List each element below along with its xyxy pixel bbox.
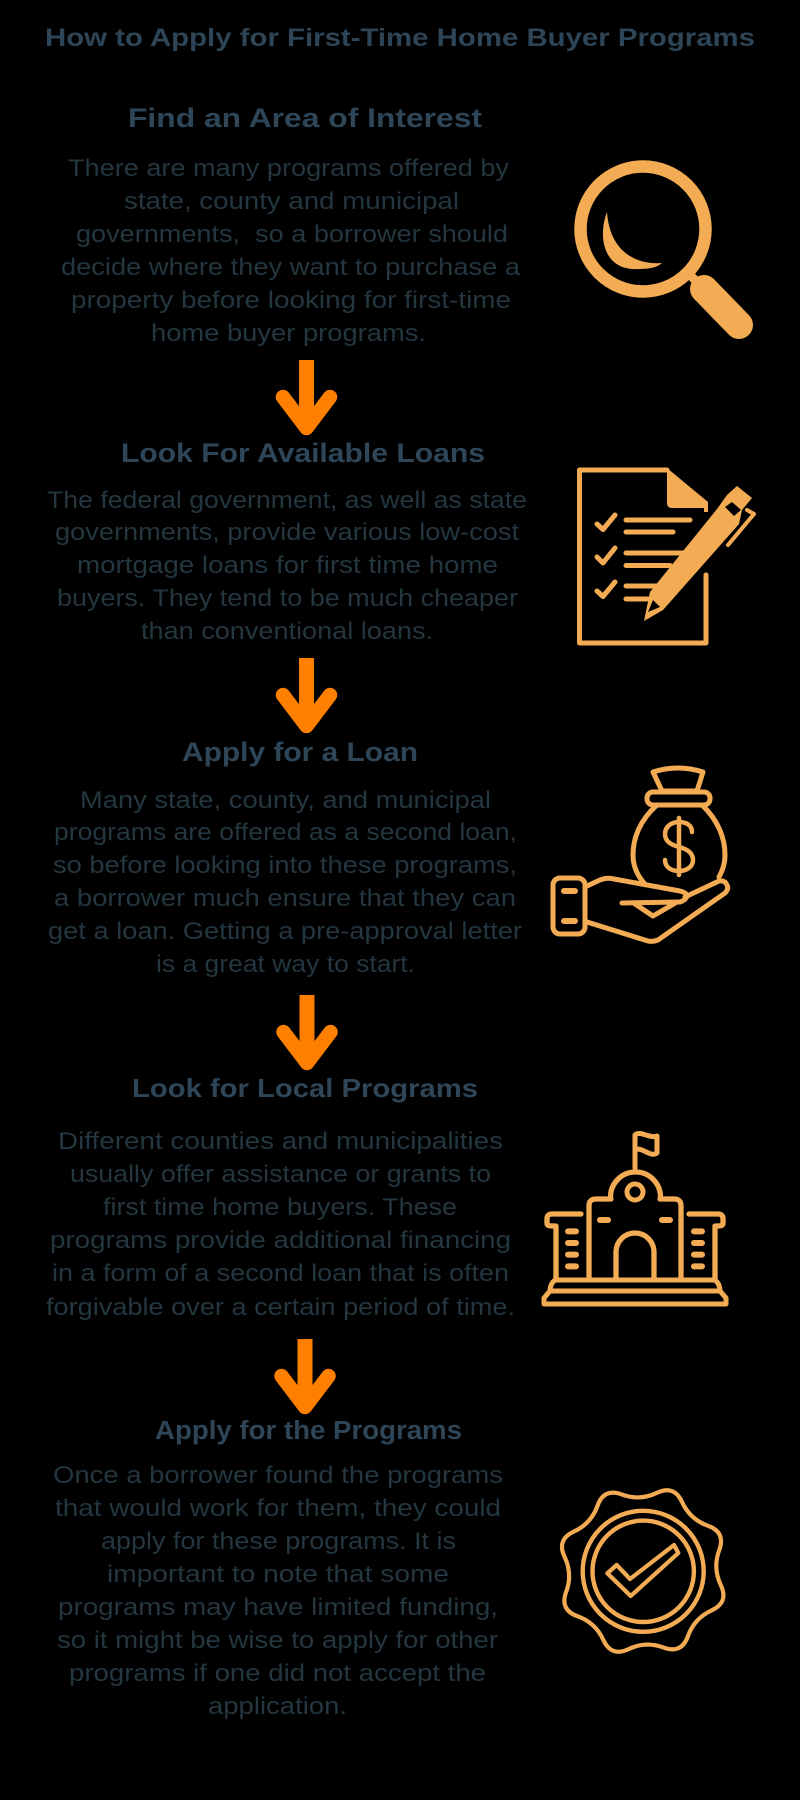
text block: step 3: programs are offered as a second loan,: [54, 819, 517, 846]
heading: step 2: Look For Available Loans: [121, 438, 485, 468]
text block: step 3: so before looking into these programs,: [53, 852, 517, 879]
arrow: step 2 to step 3: [283, 658, 330, 726]
heading: step 5: Apply for the Programs: [155, 1417, 462, 1445]
text block: step 5: important to note that some: [107, 1561, 449, 1588]
text block: step 1: governments, so a borrower should: [76, 221, 508, 248]
text block: step 4: Different counties and municipalities: [58, 1128, 503, 1155]
text block: step 1: [61, 155, 521, 347]
text block: step 1: home buyer programs.: [151, 320, 426, 347]
panel: step 2 look for available loans: [47, 438, 754, 645]
text block: step 2: [47, 487, 527, 645]
text block: step 2: buyers. They tend to be much cheaper: [57, 585, 518, 612]
text block: step 1: There are many programs offered by: [68, 155, 509, 182]
text block: step 3: [48, 787, 522, 978]
text block: step 4: first time home buyers. These: [103, 1194, 457, 1221]
text block: step 5: that would work for them, they could: [55, 1495, 501, 1522]
panel: step 4 look for local programs: [46, 1073, 726, 1321]
heading: step 1: Find an Area of Interest: [128, 103, 482, 133]
panel: step 1 find an area of interest: [61, 103, 739, 347]
heading: step 3: Apply for a Loan: [182, 737, 418, 767]
text block: step 1: property before looking for first-time: [71, 287, 511, 314]
text block: step 4: [46, 1128, 515, 1321]
icon: magnifying glass: [580, 166, 739, 325]
icon: government building: [544, 1133, 726, 1304]
icon: hand holding money bag: [553, 768, 728, 941]
text block: step 4: programs provide additional financing: [50, 1227, 511, 1254]
panel: step 3 apply for a loan: [48, 737, 728, 978]
text block: step 1: state, county and municipal: [124, 188, 459, 215]
text block: step 5: application.: [208, 1693, 347, 1720]
panel: step 5 apply for the programs: [53, 1417, 723, 1720]
text block: step 5: so it might be wise to apply for other: [57, 1627, 498, 1654]
text block: step 4: in a form of a second loan that is often: [52, 1260, 509, 1287]
text block: step 5: programs if one did not accept the: [69, 1660, 486, 1687]
text block: step 3: a borrower much ensure that they can: [54, 885, 516, 912]
arrow: step 1 to step 2: [283, 360, 330, 428]
text block: step 3: is a great way to start.: [156, 951, 415, 978]
text block: step 3: get a loan. Getting a pre-approval letter: [48, 918, 522, 945]
text block: step 5: programs may have limited funding,: [58, 1594, 498, 1621]
text block: step 2: governments, provide various low-cost: [55, 519, 519, 546]
text block: step 5: Once a borrower found the programs: [53, 1462, 503, 1489]
icon: checklist and pen: [580, 468, 754, 643]
heading: step 4: Look for Local Programs: [132, 1073, 478, 1103]
text block: step 3: Many state, county, and municipal: [80, 787, 491, 814]
text block: step 2: than conventional loans.: [141, 618, 433, 645]
arrow: step 4 to step 5: [282, 1339, 328, 1407]
icon: approval seal with check mark: [562, 1490, 723, 1652]
text block: step 2: mortgage loans for first time home: [77, 552, 498, 579]
text block: step 4: forgivable over a certain period of time.: [46, 1294, 515, 1321]
text block: step 5: [53, 1462, 503, 1720]
title: How to Apply for First-Time Home Buyer Programs: [45, 24, 755, 52]
text block: step 1: decide where they want to purchase a: [61, 254, 521, 281]
text block: step 5: apply for these programs. It is: [101, 1528, 456, 1555]
text block: step 2: The federal government, as well as state: [47, 487, 527, 514]
arrow: step 3 to step 4: [284, 995, 330, 1063]
text block: step 4: usually offer assistance or grants to: [70, 1161, 491, 1188]
